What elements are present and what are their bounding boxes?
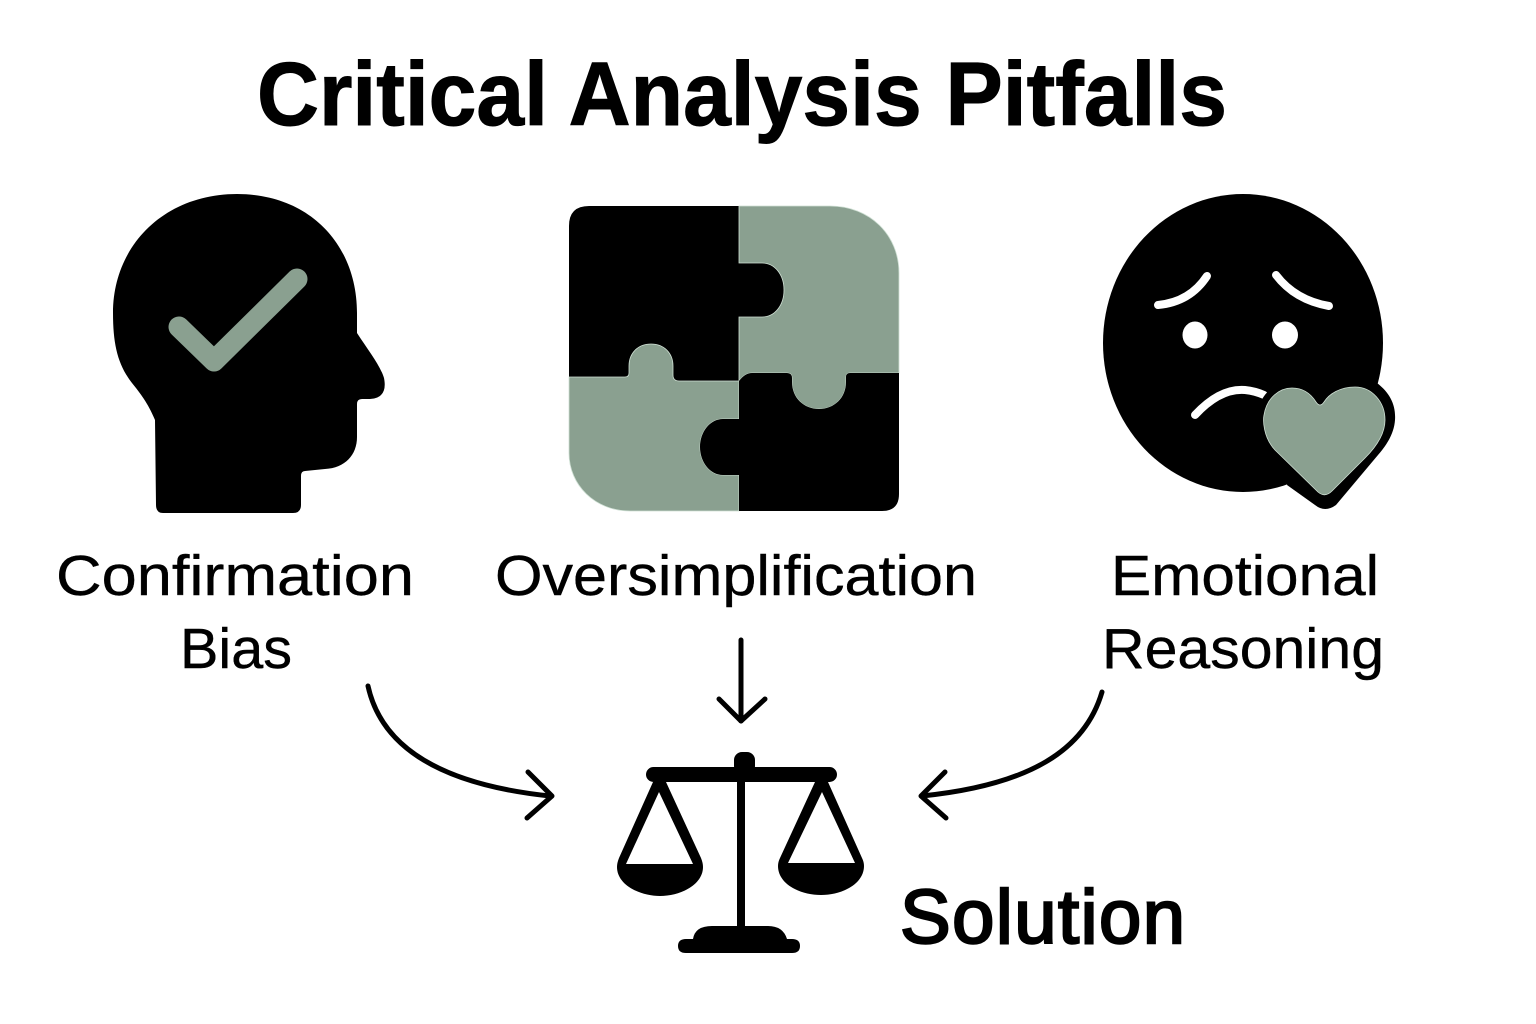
icon: head with checkmark: [113, 194, 385, 513]
label: Emotional Reasoning: Reasoning: [1102, 617, 1384, 681]
icon: puzzle: [569, 206, 899, 511]
title: Critical Analysis Pitfalls: [257, 45, 1227, 145]
icon: balance scales: [617, 752, 864, 953]
label: Confirmation Bias: [56, 544, 414, 681]
label: Emotional Reasoning: [1102, 544, 1384, 681]
arrow: center down: [719, 640, 765, 721]
label: Emotional Reasoning: Emotional: [1111, 544, 1379, 608]
arrow: right curve: [921, 692, 1102, 818]
label: Solution: Solution: [900, 875, 1185, 960]
label: Confirmation Bias: Confirmation: [56, 544, 414, 608]
label: Oversimplification: Oversimplification: [495, 544, 977, 608]
icon: sad face with heart: [1103, 194, 1395, 509]
label: Confirmation Bias: Bias: [180, 617, 292, 681]
arrow: left curve: [368, 686, 552, 818]
